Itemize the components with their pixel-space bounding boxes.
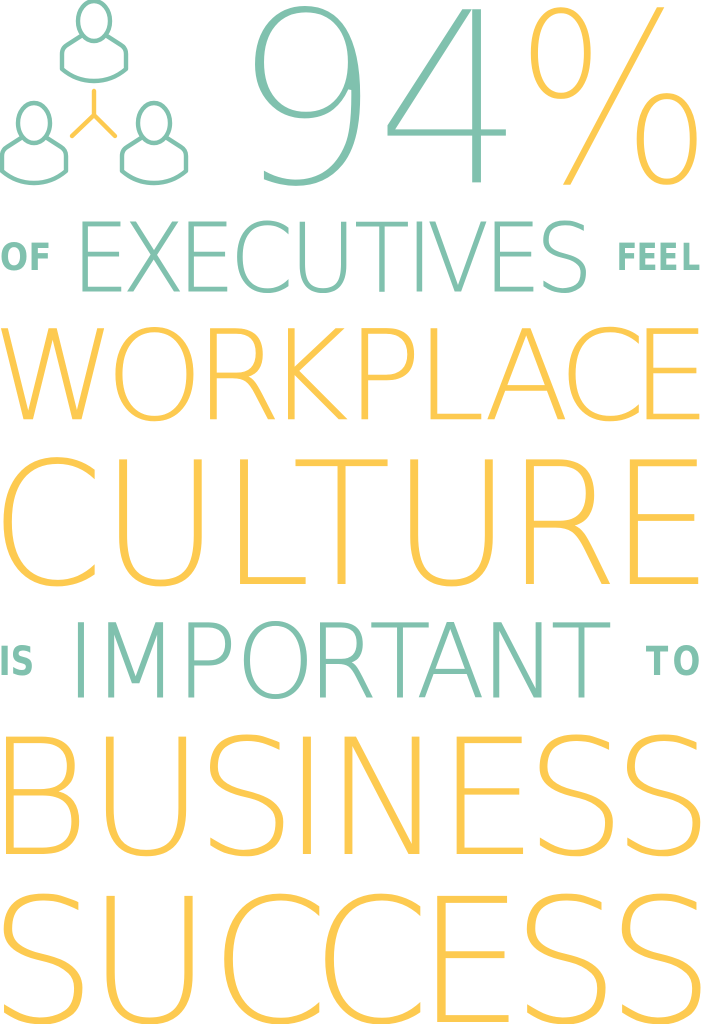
text: FEEL: FEEL [617,236,700,279]
text: WORKPLACE: WORKPLACE [0,305,701,449]
text: OF: OF [0,236,51,279]
text: IMPORTANT: IMPORTANT [66,603,612,721]
icon: yellow connector [72,91,115,136]
text: TO: TO [646,638,700,685]
icon: top person [62,1,126,81]
icon: three connected people [2,1,186,183]
icon: right person [122,103,186,183]
icon: left person [2,103,66,183]
text: EXECUTIVES: EXECUTIVES [72,203,593,314]
